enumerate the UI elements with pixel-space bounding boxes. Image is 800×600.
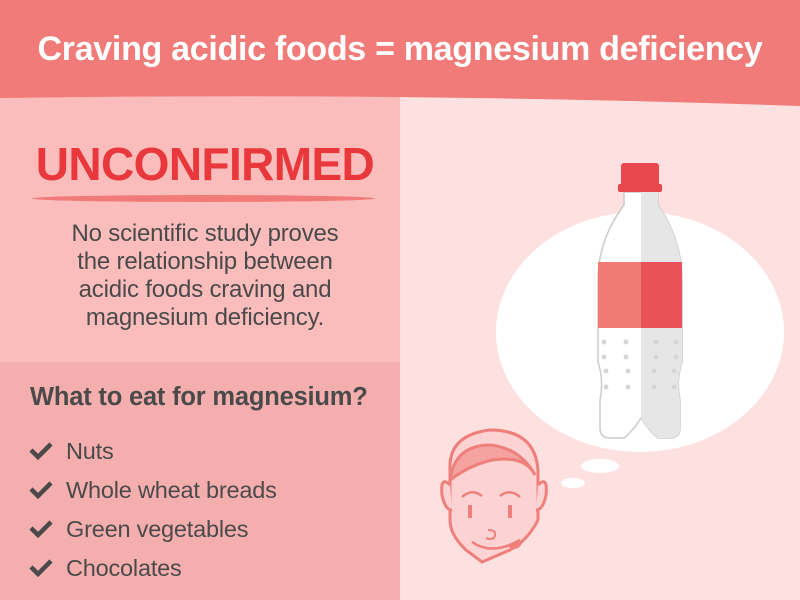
- item: Whole wheat breads: Whole wheat breads: [66, 477, 277, 503]
- explanation text: No scientific study proves: [72, 220, 338, 247]
- icon: bottle: [598, 163, 682, 438]
- illustration: thought bubble with bottle and face: [440, 163, 784, 564]
- item: Chocolates: Chocolates: [66, 555, 182, 581]
- item: Nuts: [30, 438, 114, 464]
- underline: [32, 195, 375, 202]
- left panel top: [0, 0, 400, 362]
- item: Green vegetables: Green vegetables: [66, 516, 248, 542]
- title: Craving acidic foods = magnesium deficiency: [38, 30, 762, 68]
- explanation text: the relationship between: [77, 248, 333, 275]
- item: Nuts: Nuts: [66, 438, 114, 464]
- explanation text: magnesium deficiency.: [86, 304, 324, 331]
- verdict: UNCONFIRMED: UNCONFIRMED: [36, 138, 374, 190]
- list heading: What to eat for magnesium?: [30, 383, 368, 411]
- header banner: [0, 0, 800, 106]
- icon: face: [442, 430, 546, 562]
- left panel bottom: [0, 362, 400, 600]
- explanation text: acidic foods craving and: [79, 276, 331, 303]
- thought bubble: [496, 212, 784, 488]
- explanation text: [72, 220, 338, 331]
- food list: [30, 438, 277, 581]
